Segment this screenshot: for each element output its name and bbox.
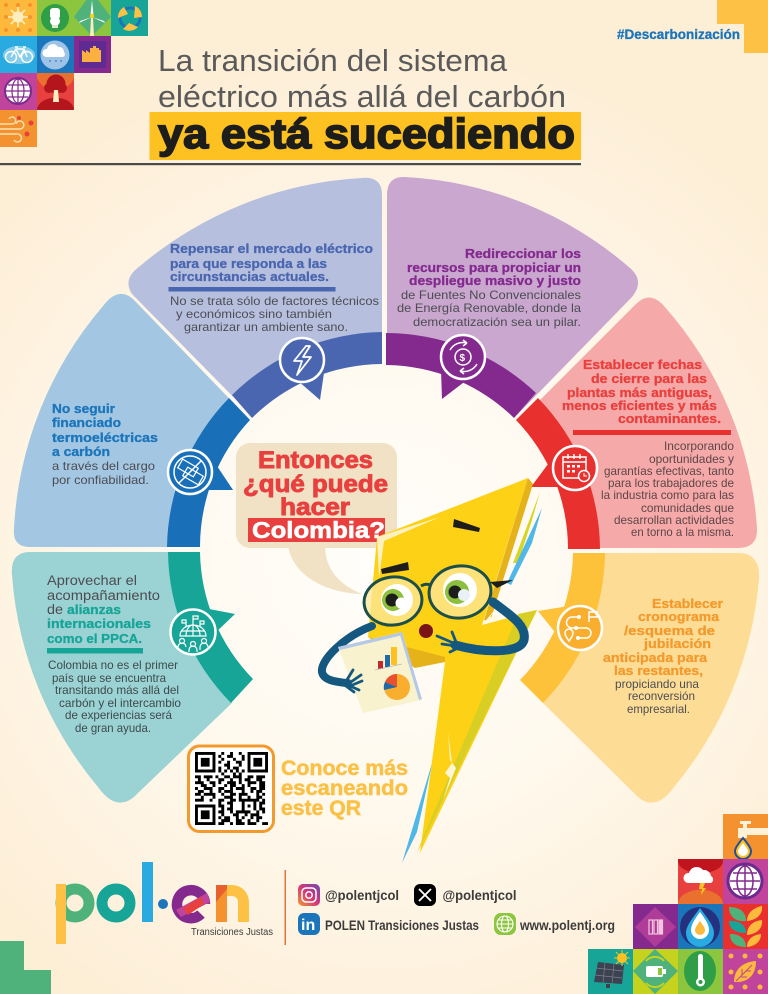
pointer [297,366,325,400]
body text: la industria como para las [601,488,734,502]
rule [168,287,336,292]
QR frame [188,746,274,832]
chart paper [338,632,422,713]
title rule [0,163,581,165]
icon: globe with flags and people [170,610,216,654]
footer divider [284,870,286,945]
heading: Establecer fechas [583,357,702,372]
dot [158,899,168,909]
heading: a carbón [52,444,110,459]
panel background [543,553,759,803]
icon grid: top left energy tiles [0,0,148,147]
ring segment [232,332,382,418]
body text: desarrollan actividades [614,513,734,527]
bubble text: hacer [280,494,350,521]
tile: wind turbine [74,0,111,36]
title [0,44,581,165]
glasses and eyes [361,562,513,629]
tile: leaf [723,949,768,994]
heading [407,246,581,288]
body text: en torno a la misma. [631,525,734,539]
ring segment [168,552,253,703]
decorative corner block bottom left [0,941,51,994]
panel: alianzas internacionales [12,552,253,803]
body text [601,439,734,539]
ring segment [516,398,600,549]
body text [170,294,379,334]
tile: solar panel [588,949,633,994]
panel background [12,552,232,803]
speech bubble [236,443,397,594]
pointer [441,370,472,399]
icon: calendar with clock [553,446,597,490]
tile: storm cloud [678,859,723,904]
body text: transitando más allá del [55,683,179,697]
linkedin name: POLEN Transiciones Justas [325,917,479,933]
heading: /esquema de [624,623,715,638]
tile: thermometer [678,949,723,994]
heading: acompañamiento [47,588,160,603]
letter o [102,889,130,917]
tile: bicycle [0,36,37,73]
QR caption [281,757,408,820]
pointer [538,606,569,636]
heading [47,573,160,646]
heading: plantas más antiguas, [567,385,712,400]
heading: jubilación [643,636,711,651]
icon: X [414,884,436,906]
bubble text: ¿qué puede [243,471,388,498]
QR caption: Conoce más [281,757,408,780]
body text: No se trata sólo de factores técnicos [170,294,379,308]
mouth [419,624,433,638]
left hand [345,670,362,692]
icon: circular dollar: $ [460,353,466,364]
heading: de [47,602,63,617]
heading: como el PPCA. [47,631,142,646]
heading: circunstancias actuales. [170,269,329,284]
bubble text [243,447,388,521]
title line 3: ya está sucediendo [158,110,575,157]
tile: water drop [678,904,723,949]
website url: www.polentj.org [519,917,615,933]
panel background [387,177,638,415]
logo tagline: Transiciones Justas [191,927,273,938]
body text: y económicos sino también [176,307,332,321]
tile: globe [0,73,37,110]
title highlight box [150,112,581,160]
body text: de gran ayuda. [75,721,151,735]
bolt body [368,478,537,853]
body text: empresarial. [627,702,690,716]
heading [170,241,373,284]
letter e [176,890,210,918]
tile: tree [37,73,74,110]
right arm and hand [437,602,524,652]
tile: leaves [723,904,768,949]
QR caption: este QR [281,797,361,820]
icon: linkedin [298,913,320,935]
social links [298,884,615,935]
heading: financiado [52,415,121,430]
rule [573,430,731,435]
bubble body [236,443,397,548]
logo: polen [56,862,273,944]
heading: recursos para propiciar un [407,260,581,275]
tile: water tap [723,814,768,859]
panel: repensar el mercado [128,178,382,418]
heading: No seguir [52,401,115,416]
bubble tail [288,545,362,594]
body text: propiciando una [615,677,699,691]
heading: anticipada para [603,650,708,665]
instagram handle: @polentjcol [325,887,399,903]
hashtag: #Descarbonización [617,27,740,42]
body text: garantizar un ambiente sano. [184,320,348,334]
body text: de Energía Renovable, donde la [397,301,581,315]
heading: de cierre para las [591,371,707,386]
body text: democratización sea un pilar. [413,315,581,329]
body text: de experiencias será [65,708,172,722]
tile: wind [0,110,37,147]
heading: Establecer [652,596,723,611]
body text [615,677,699,716]
character: lightning bolt mascot [322,478,542,863]
heading: contaminantes. [618,411,721,426]
ring segment [386,333,536,418]
icon: route with flag [558,606,602,650]
bolt back strips [513,492,540,563]
tile: factory [74,36,111,73]
heading: Redireccionar los [465,246,581,261]
body text: Colombia no es el primer [48,658,178,672]
heading: internacionales [47,616,151,631]
icon: lightning bolt [280,338,324,382]
pointer [205,466,233,490]
heading: despliegue masivo y justo [409,273,581,288]
body text: carbón y el intercambio [59,696,181,710]
tile: cloud [37,36,74,73]
panel: no seguir financiando [14,294,250,547]
heading: cronograma [638,609,720,624]
icon: linkedin: in [301,917,315,934]
body text: oportunidades y [649,452,734,466]
heading: menos eficientes y más [562,398,717,413]
body text: reconversión [628,689,695,703]
body text: Incorporando [664,439,734,453]
panel background [520,297,757,548]
tile: sun [0,0,37,36]
decorative corner block top right [717,0,768,53]
ring segment [167,398,250,547]
heading: Repensar el mercado eléctrico [170,241,373,256]
left arm [322,626,372,684]
QR code [188,746,274,832]
body text [48,658,181,735]
title line 1: La transición del sistema [158,44,507,78]
body text: país que se encuentra [52,671,166,685]
QR caption: escaneando [281,777,408,800]
letter n [216,885,249,922]
tile: recycle [111,0,148,36]
ring segment [520,553,605,703]
icon: circular dollar [441,335,485,379]
heading: para que responda a las [170,256,327,271]
bubble text: Entonces [258,447,373,474]
heading: termoeléctricas [52,430,158,445]
tile: globe [723,859,768,904]
QR modules [195,753,268,824]
body text: por confiabilidad. [52,473,149,487]
title line 2: eléctrico más allá del carbón [158,80,566,114]
bolt highlights [377,517,440,578]
body text: garantías efectivas, tanto [604,464,734,478]
rule [47,648,143,654]
heading: Aprovechar el [47,573,137,588]
tile: battery [633,949,678,994]
icon: instagram [298,884,320,906]
body text [397,288,581,329]
tile: light bulb [37,0,74,36]
body text: para los trabajadores de [608,476,734,490]
icon grid: bottom right energy tiles [588,814,768,994]
body text [52,459,155,487]
icon: crossed-out money [168,450,212,494]
panel: cronograma de jubilación [520,553,759,803]
letter l [142,862,153,922]
panel background [14,294,250,547]
icon: website globe [494,913,516,935]
heading: las restantes, [614,663,703,678]
heading [52,401,158,459]
letter p [56,884,89,944]
pointer [531,460,560,487]
heading [603,596,723,678]
body text: comunidades que [641,501,734,515]
body text: de Fuentes No Convencionales [401,288,581,302]
pointer [204,608,235,636]
body text: a través del cargo [52,459,155,473]
panel: redireccionar los recursos [386,177,638,418]
panel background [128,178,382,417]
X handle: @polentjcol [442,887,516,903]
tile: batteries diamond [633,904,678,949]
Colombia label: Colombia? [252,517,385,543]
heading [562,357,721,426]
heading: alianzas [67,602,121,617]
eyebrows [381,519,480,574]
panel: fechas de cierre [516,297,757,549]
